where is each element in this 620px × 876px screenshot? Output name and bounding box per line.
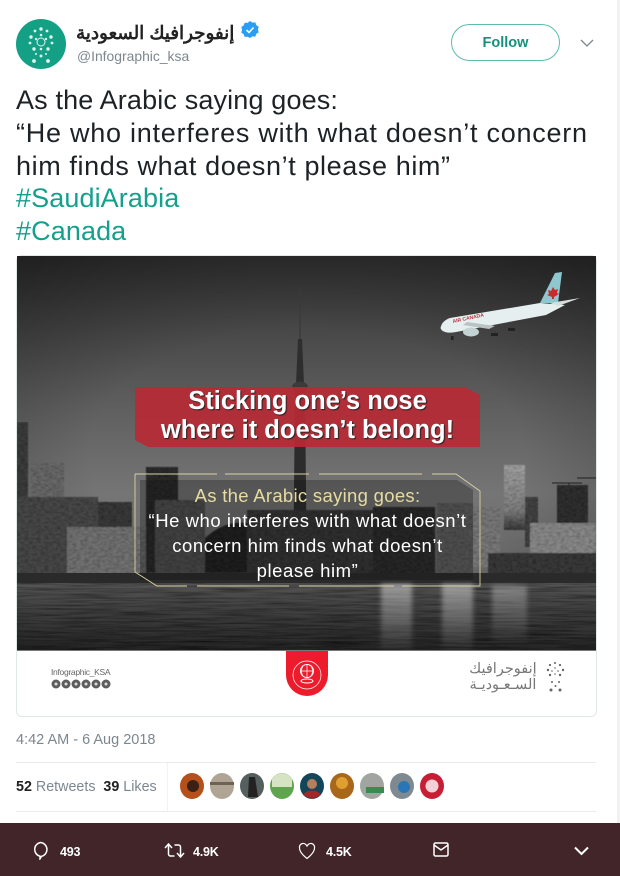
tweet text: #Canada — [16, 216, 126, 246]
tweet text: As the Arabic saying goes: — [16, 85, 338, 115]
account name: إنفوجرافيك السعودية — [76, 22, 234, 43]
arabic wordmark — [469, 661, 537, 693]
retweet count: 4.9K — [193, 845, 219, 859]
quote text — [148, 485, 466, 581]
icon: message — [433, 842, 449, 857]
red banner — [135, 387, 480, 447]
plane — [440, 272, 580, 340]
arabic wordmark: إنفوجرافيك — [469, 661, 537, 677]
right page edge — [617, 0, 620, 823]
stats divider top — [16, 762, 596, 763]
arabic wordmark: السـعـوديـة — [470, 677, 536, 693]
tweet text: #SaudiArabia — [16, 183, 179, 213]
logo dots — [546, 662, 564, 692]
social icons — [52, 680, 110, 688]
footer arabic logo — [469, 661, 564, 693]
water reflections — [381, 584, 527, 650]
retweets and likes counts: 52 Retweets 39 Likes — [16, 779, 157, 795]
sky — [17, 256, 596, 586]
icon: reply — [34, 842, 48, 860]
follow button — [451, 24, 560, 61]
tweet text — [16, 85, 588, 246]
handle text: Infographic_KSA — [51, 667, 110, 677]
quote text: “He who interferes with what doesn’t — [148, 510, 466, 531]
reply count: 493 — [60, 845, 80, 859]
skyline buildings — [17, 422, 596, 583]
stats divider vertical — [167, 763, 168, 811]
plane: AIR CANADA — [452, 312, 485, 325]
quote text: concern him finds what doesn’t — [172, 535, 443, 556]
quote box frame — [135, 474, 480, 586]
stats divider bottom — [16, 811, 596, 812]
icon: dropdown chevron — [580, 40, 594, 47]
timestamp: 4:42 AM - 6 Aug 2018 — [16, 732, 155, 748]
banner heading: where it doesn’t belong! — [161, 416, 454, 444]
like count: 4.5K — [326, 845, 352, 859]
tweet text: him finds what doesn’t please him” — [16, 151, 451, 181]
icon: retweet — [164, 843, 184, 858]
media card — [16, 255, 597, 717]
tree line — [17, 573, 596, 584]
photo: Toronto skyline with plane — [17, 256, 596, 651]
quote text: please him” — [257, 560, 358, 581]
bottom action bar — [0, 823, 620, 876]
follow button: Follow — [483, 35, 528, 51]
icon: like — [298, 842, 316, 860]
tweet text: “He who interferes with what doesn’t concern — [16, 118, 588, 148]
account handle: @Infographic_ksa — [77, 48, 189, 64]
CN tower — [292, 287, 308, 540]
quote text: As the Arabic saying goes: — [195, 485, 420, 506]
footer handle and social icons — [51, 667, 110, 688]
banner heading — [160, 387, 454, 445]
liker avatars — [180, 773, 444, 799]
crane — [552, 478, 596, 497]
water — [17, 583, 596, 651]
avatar: infographic ksa logo — [16, 19, 66, 69]
banner heading: Sticking one’s nose — [188, 387, 427, 415]
quote box shade — [140, 480, 473, 580]
icon: more chevron — [574, 846, 589, 856]
icon: verified badge — [241, 21, 259, 38]
footer tab: red globe badge — [286, 651, 328, 696]
